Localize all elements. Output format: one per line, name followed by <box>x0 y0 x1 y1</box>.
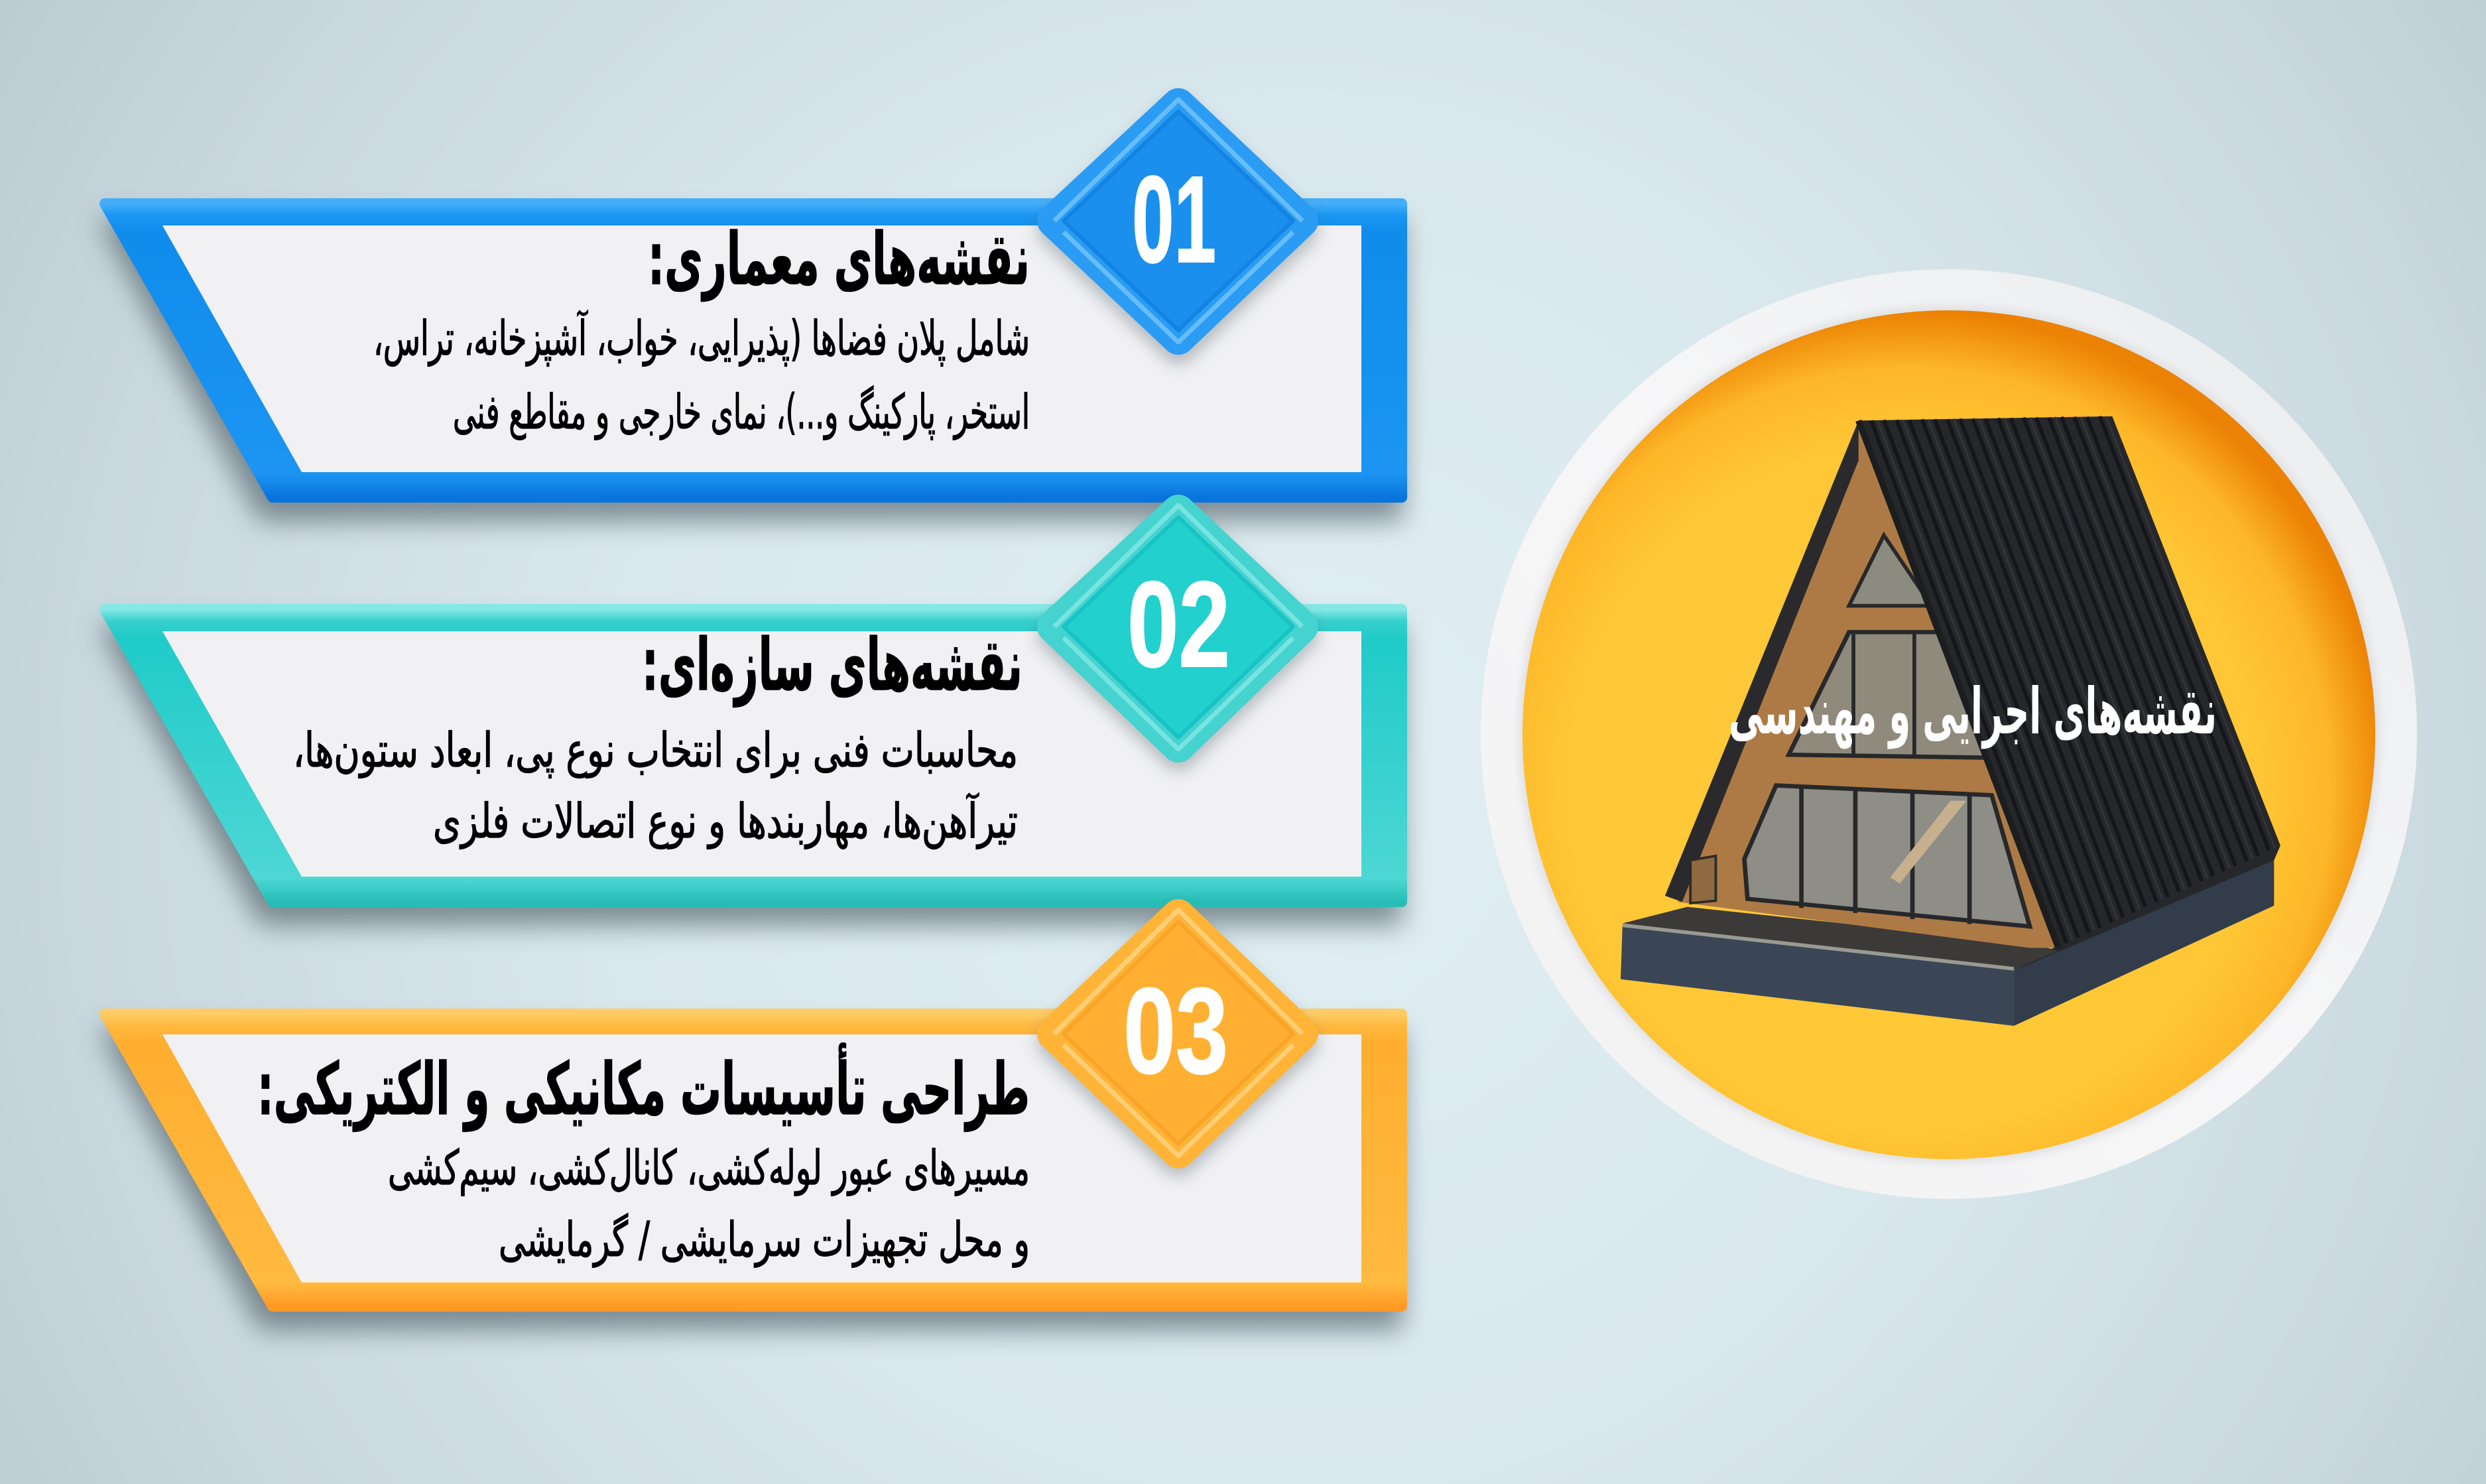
number 01: 01 <box>1132 151 1216 288</box>
lower window <box>1745 785 2030 926</box>
diamond badge 02 <box>1054 505 1302 755</box>
card 2 frame <box>105 609 1402 902</box>
yellow disc <box>1523 310 2375 1159</box>
card 1: architectural drawings <box>98 204 1402 521</box>
card 3: mechanical and electrical <box>98 1014 1402 1330</box>
side frame <box>1665 420 1859 902</box>
card 1 panel <box>162 225 1361 472</box>
card 2 body line 1: محاسبات فنی برای انتخاب نوع پی، ابعاد ستون‌ها، <box>293 722 1018 778</box>
card 2 body line 2: تیرآهن‌ها، مهاربندها و نوع اتصالات فلزی <box>433 792 1018 849</box>
circle panel with house <box>1481 269 2417 1199</box>
card 3 frame <box>105 1014 1402 1306</box>
number 02: 02 <box>1127 556 1230 692</box>
roof <box>1859 416 2280 948</box>
icon: A-frame house <box>1621 416 2280 1026</box>
card 2 panel <box>162 631 1361 877</box>
card 1 body line 1: شامل پلان فضاها (پذیرایی، خواب، آشپزخانه، تراس، <box>373 310 1030 367</box>
white ring <box>1481 269 2417 1199</box>
card 2: structural drawings <box>98 609 1402 926</box>
middle window <box>1788 632 1998 758</box>
diamond badge 01 <box>1054 99 1302 348</box>
railing <box>1690 856 1715 903</box>
card 3 body line 1: مسیرهای عبور لوله‌کشی، کانال‌کشی، سیم‌کشی <box>388 1140 1030 1196</box>
diamond badge 03 <box>1054 910 1302 1160</box>
card 2 title: نقشه‌های سازه‌ای: <box>642 624 1023 707</box>
card 3 panel <box>162 1034 1361 1282</box>
card 1 frame <box>105 204 1402 497</box>
card 1 title: نقشه‌های معماری: <box>648 218 1030 301</box>
card 1 body line 2: استخر، پارکینگ و...)، نمای خارجی و مقاطع فنی <box>453 384 1030 440</box>
number 03: 03 <box>1123 962 1228 1099</box>
plinth <box>1621 925 2014 1026</box>
card 3 body line 2: و محل تجهیزات سرمایشی / گرمایشی <box>499 1211 1030 1268</box>
card 3 title: طراحی تأسیسات مکانیکی و الکتریکی: <box>257 1043 1030 1132</box>
top window <box>1849 535 1932 606</box>
facade wood <box>1678 420 2058 948</box>
